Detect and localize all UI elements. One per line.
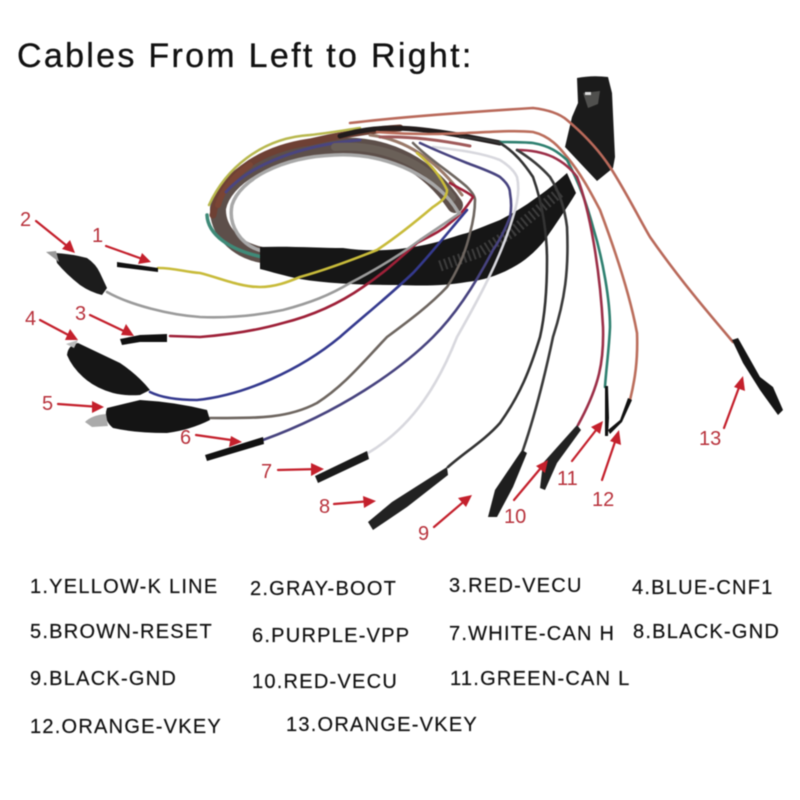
number labels and red arrows: 5: [42, 393, 53, 415]
number labels and red arrows: 1: [92, 225, 103, 247]
alligator clip 2: [46, 251, 107, 295]
wire loop bundle: [207, 128, 500, 257]
legend list: 1.YELLOW-K LINE: [30, 576, 218, 598]
legend list: 5.BROWN-RESET: [30, 621, 213, 643]
number labels and red arrows: 11: [557, 468, 578, 490]
legend list: 8.BLACK-GND: [633, 621, 780, 643]
braided sleeve: [260, 173, 576, 286]
wire 10: red: [517, 150, 603, 425]
number labels and red arrows: 9: [418, 523, 429, 545]
legend list: 13.ORANGE-VKEY: [286, 714, 478, 736]
legend list: 6.PURPLE-VPP: [252, 625, 410, 647]
wire 3: red: [170, 183, 473, 337]
wire 11: green: [500, 142, 610, 387]
number labels and red arrows: 2: [20, 209, 31, 231]
pin 9: [488, 450, 527, 517]
pin 8: [368, 467, 448, 530]
number labels and red arrows: 8: [319, 496, 330, 518]
wire 13: orange: [350, 108, 733, 342]
number labels and red arrows: 4: [25, 308, 36, 330]
pin 3: [120, 334, 167, 345]
number labels and red arrows: 6: [180, 427, 191, 449]
wire 1: yellow: [158, 153, 447, 287]
pin 13: [732, 338, 783, 415]
wire 6: purple: [263, 143, 511, 440]
pin 12: [608, 398, 632, 434]
wire: brown: [210, 143, 475, 418]
legend list: 12.ORANGE-VKEY: [30, 716, 222, 738]
connector clip: [565, 76, 615, 181]
wire 7: white: [368, 147, 518, 453]
legend list: 4.BLUE-CNF1: [632, 577, 774, 599]
number labels and red arrows: 3: [75, 303, 86, 325]
legend list: 11.GREEN-CAN L: [450, 668, 631, 690]
pin 7: [315, 451, 369, 483]
number labels and red arrows: 10: [504, 506, 526, 528]
number labels and red arrows: 7: [261, 461, 272, 483]
legend list: 9.BLACK-GND: [30, 668, 177, 690]
wire 2: gray: [107, 213, 460, 317]
title: Cables From Left to Right:: [17, 37, 474, 75]
alligator clip 4: [66, 340, 150, 395]
legend list: 3.RED-VECU: [449, 575, 583, 597]
wire 12: orange: [377, 131, 637, 400]
legend list: 7.WHITE-CAN H: [449, 623, 615, 645]
pin 10: [540, 425, 581, 490]
pin 1: [117, 262, 158, 272]
legend list: [30, 575, 780, 738]
number labels and red arrows: 13: [699, 428, 721, 450]
legend list: 2.GRAY-BOOT: [250, 578, 397, 600]
alligator clip 5: [85, 400, 210, 433]
pin 11: [605, 386, 609, 436]
wire 9: black: [517, 150, 567, 450]
wire 8: black: [448, 137, 547, 467]
number labels and red arrows: [20, 209, 745, 545]
number labels and red arrows: 12: [592, 489, 614, 511]
wire 4: blue: [150, 210, 467, 400]
pin 6: [205, 437, 264, 461]
legend list: 10.RED-VECU: [252, 671, 398, 693]
